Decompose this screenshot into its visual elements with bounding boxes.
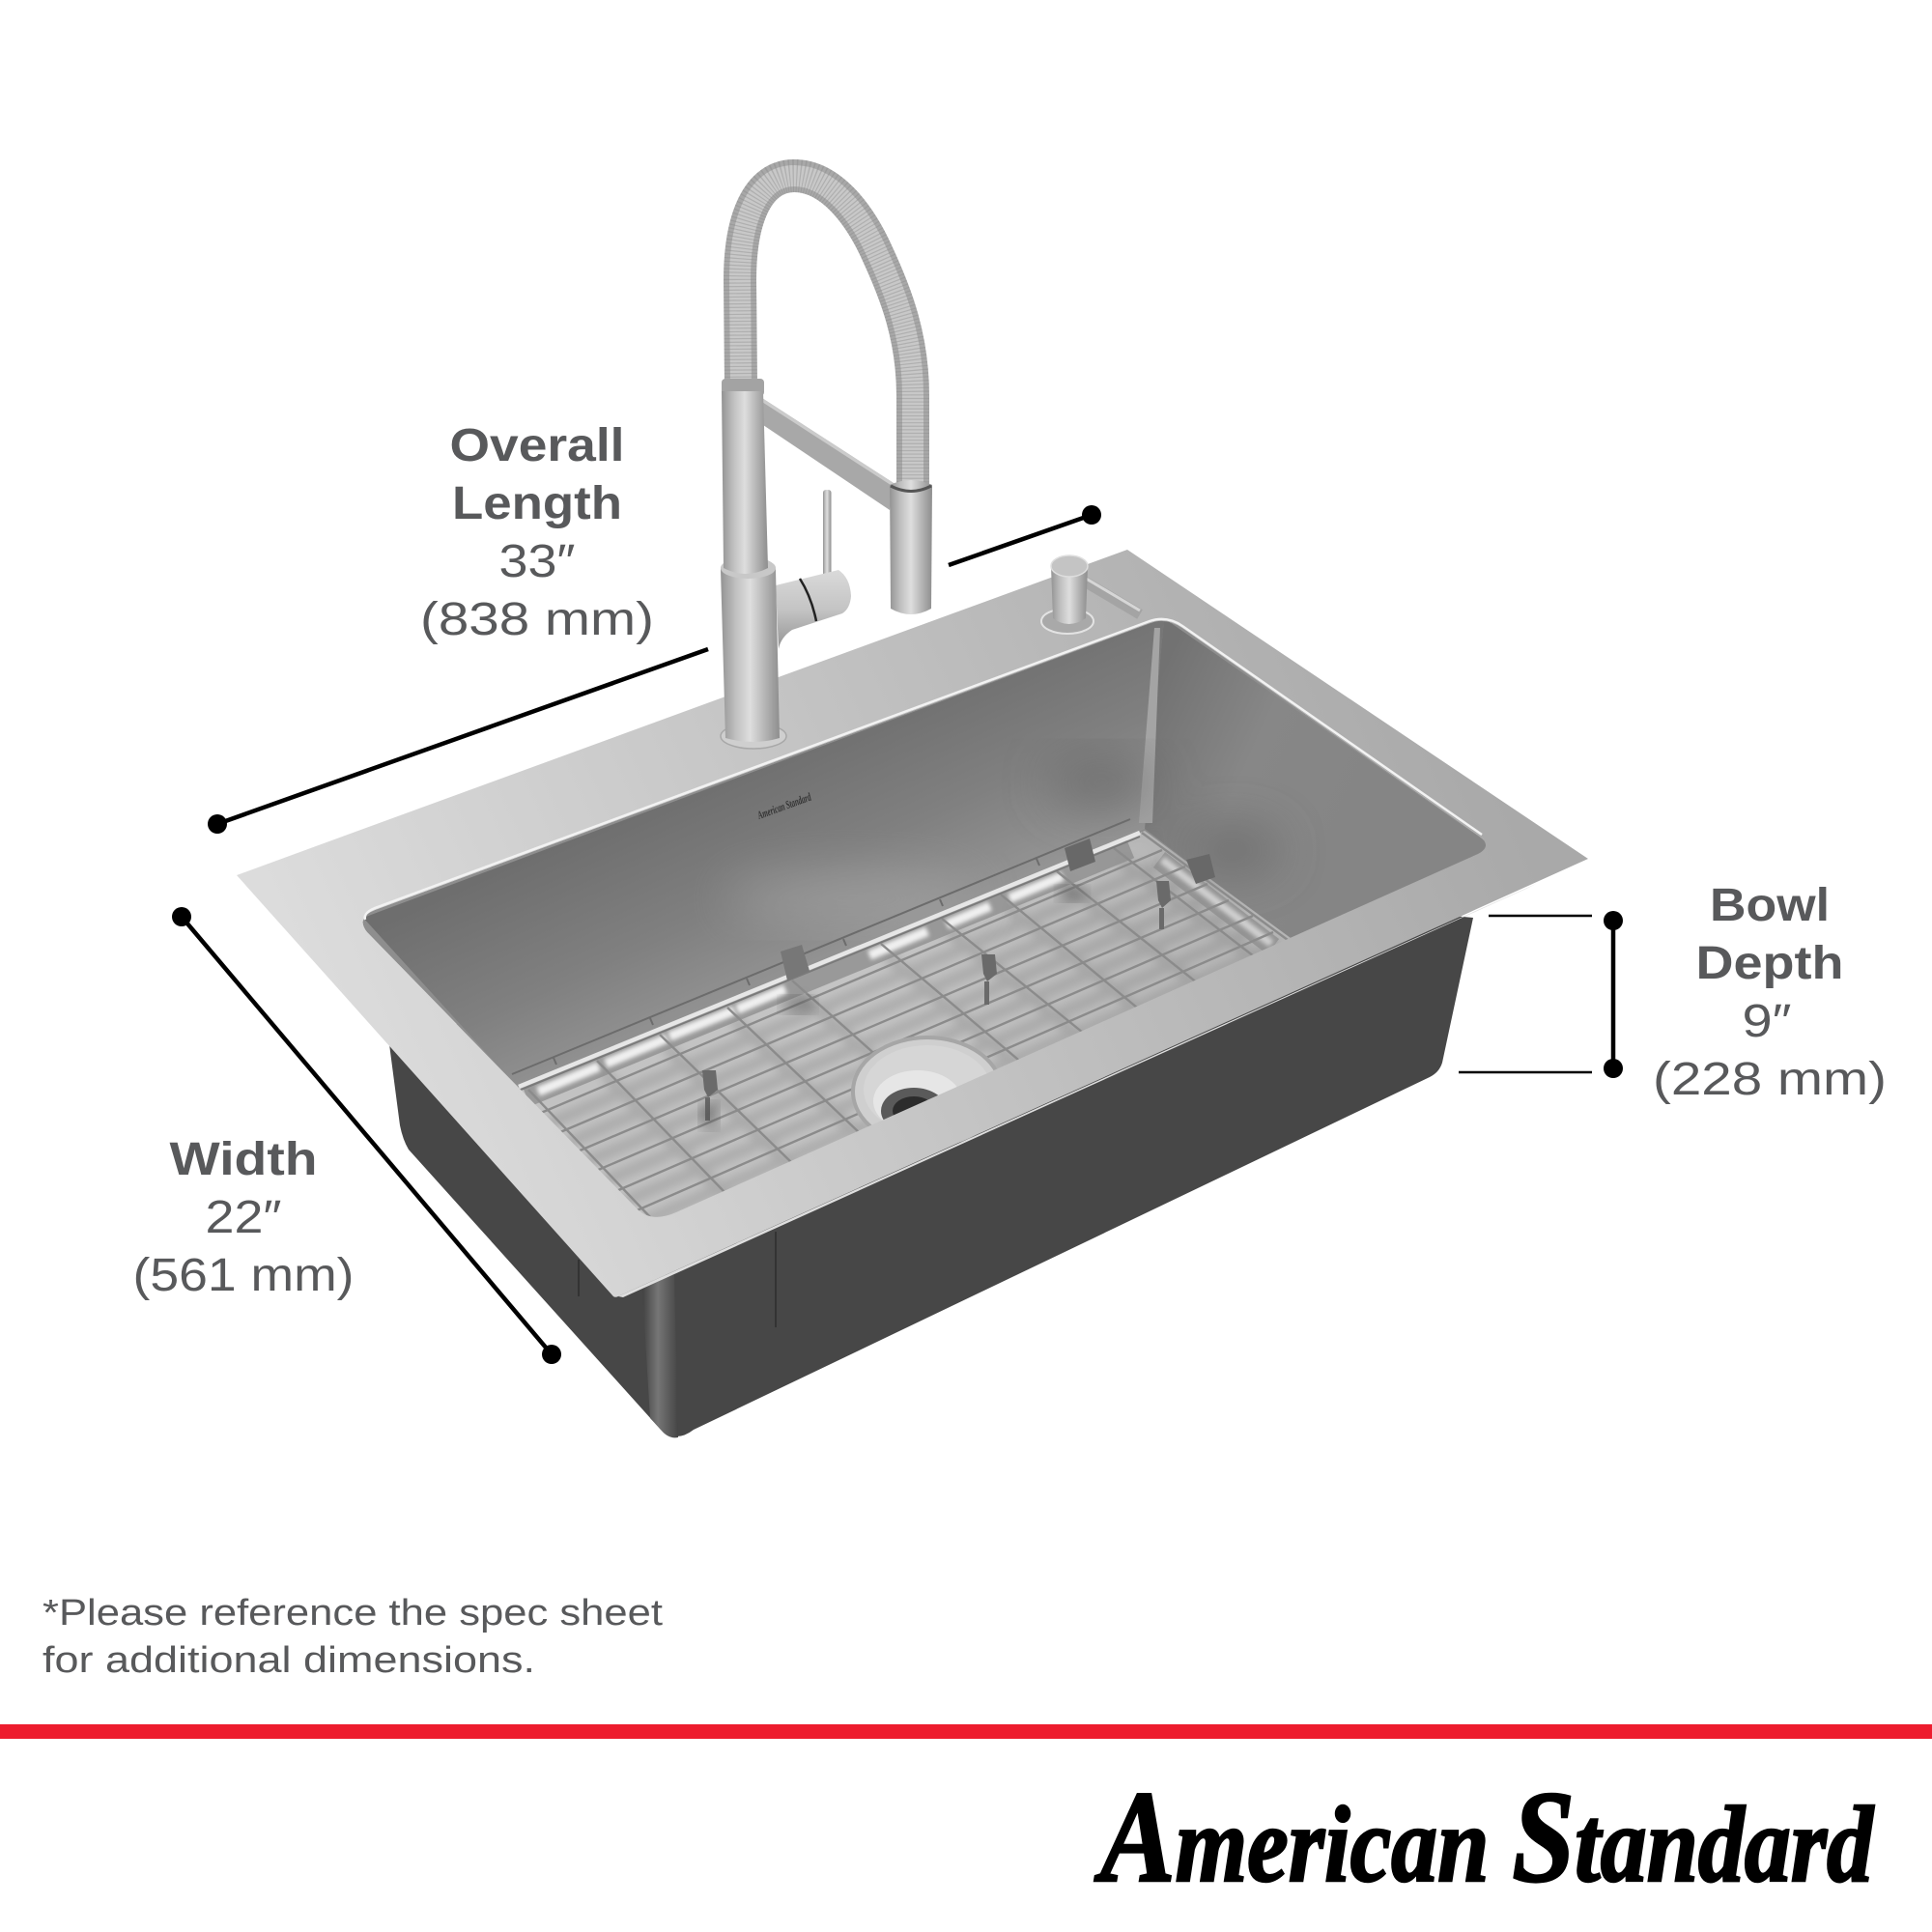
- label: width: 22″: [205, 1192, 282, 1243]
- label: overall length: (838 mm): [420, 594, 654, 645]
- bottom grid rack: [519, 833, 1306, 1219]
- grid back rail: [519, 833, 1140, 1087]
- label: width: Width: [170, 1134, 317, 1185]
- red divider bar: [0, 1724, 1932, 1739]
- label: bowl depth: Bowl: [1710, 880, 1830, 931]
- label: overall length: [420, 420, 654, 645]
- grid blurred reflection: [547, 860, 1279, 1223]
- faucet handle hub: [776, 570, 851, 649]
- label: overall length: Length: [452, 478, 622, 529]
- faucet body: [721, 556, 780, 742]
- bowl rim highlight: [365, 619, 1482, 920]
- grid brackets and feet: [699, 838, 1215, 1129]
- label: bowl depth: [1653, 880, 1887, 1105]
- footnote: [43, 1593, 664, 1681]
- label: width: [133, 1134, 354, 1301]
- deck underside strip: [618, 884, 1536, 1297]
- reflective tubes along floor edges: [526, 848, 1273, 1096]
- faucet lever: [823, 490, 831, 577]
- spray head: [890, 480, 932, 614]
- bowl floor: [520, 831, 1309, 1229]
- label: width: (561 mm): [133, 1250, 354, 1301]
- brand mark on deck: American Standard: [755, 790, 813, 822]
- dimension line: bowl depth: [1459, 911, 1623, 1078]
- label: overall length: 33″: [498, 536, 576, 587]
- label: bowl depth: Depth: [1696, 938, 1843, 989]
- drain: [853, 1037, 1002, 1146]
- label: bowl depth: (228 mm): [1653, 1054, 1887, 1105]
- footnote: for additional dimensions.: [43, 1640, 535, 1681]
- faucet flexible hose: [740, 176, 913, 488]
- dimension line: overall length: [208, 505, 1101, 834]
- bowl right wall: [1145, 618, 1492, 952]
- faucet body rim: [721, 557, 776, 579]
- label: overall length: Overall: [450, 420, 624, 471]
- wall seam with ticks: [512, 819, 1130, 1074]
- soft wall shadows: [724, 755, 1280, 923]
- faucet base flange: [721, 724, 786, 749]
- dimension line: width: [172, 907, 561, 1364]
- sink deck: [237, 550, 1588, 1297]
- bowl corner highlight: [1139, 628, 1160, 823]
- faucet crossbar: [752, 391, 894, 510]
- faucet: [721, 176, 932, 749]
- faucet upper stem: [722, 391, 768, 574]
- label: bowl depth: 9″: [1743, 996, 1792, 1047]
- bowl base fill: [363, 621, 1486, 1217]
- soap dispenser: [1041, 555, 1140, 634]
- brand logo: American Standard: [1094, 1765, 1875, 1910]
- sink basin outer body: [389, 869, 1473, 1437]
- sink bowl interior: [363, 618, 1492, 1229]
- footnote: *Please reference the spec sheet: [43, 1593, 664, 1634]
- bowl back wall: [363, 618, 1164, 1090]
- faucet collar: [722, 379, 764, 396]
